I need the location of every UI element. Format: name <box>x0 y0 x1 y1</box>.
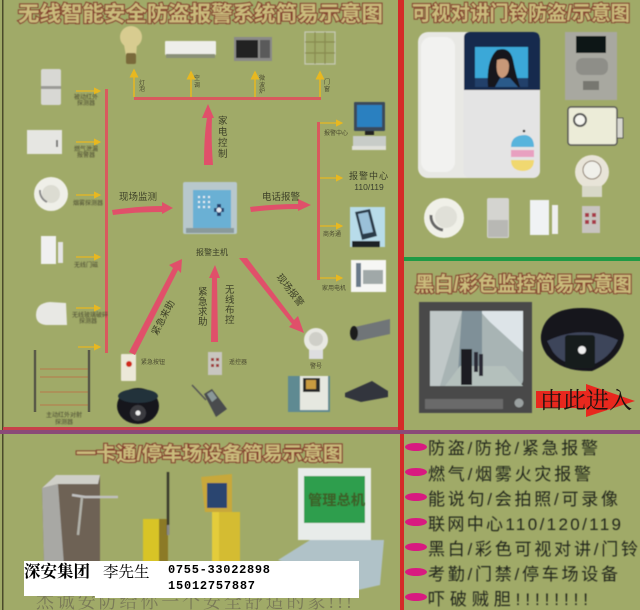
icon: air conditioner <box>165 41 216 58</box>
label: wireless arming and help: 求 <box>198 306 208 318</box>
icon: smoke detector large <box>424 198 464 238</box>
icon: light bulb <box>120 26 142 64</box>
sensor labels: 探测器 <box>77 99 95 107</box>
label: alarm center 110/119: 报警中心 <box>349 170 389 181</box>
label: remote control: 遥控器 <box>229 358 247 366</box>
sensor labels: 被动红外 <box>74 93 98 101</box>
sensor labels: 探测器 <box>55 418 73 426</box>
contact box: 15012757887 <box>168 579 255 593</box>
icon: remote control <box>208 352 222 375</box>
label: PDA: 商务通 <box>323 230 341 238</box>
appliance control bus: 空 <box>194 74 200 82</box>
arrow: on-site alarm <box>239 258 304 333</box>
label: phone alarm: 电话报警 <box>262 191 301 203</box>
icon: curtain sensor <box>36 302 67 325</box>
panel: wireless alarm system <box>18 2 390 426</box>
label: alarm host: 报警主机 <box>196 247 228 257</box>
sensor labels <box>46 93 108 426</box>
icon: CCTV monitor <box>419 302 532 413</box>
arrow: enter here <box>536 384 635 417</box>
icon: siren <box>304 328 328 359</box>
icon: video intercom small <box>288 376 330 412</box>
arrow: on-site monitoring <box>112 202 173 215</box>
sensor labels: 无线玻璃破碎 <box>72 311 108 319</box>
label: wireless arming and help: 助 <box>198 316 208 328</box>
appliance control bus: 泡 <box>139 85 145 93</box>
icon: barrier gate <box>143 472 170 563</box>
sensor labels: 报警器 <box>77 151 95 159</box>
contact box <box>24 561 359 598</box>
icon: infrared beam fence <box>35 350 89 412</box>
icon: alarm host <box>183 182 237 234</box>
sensor labels: 无线门磁 <box>74 261 98 269</box>
appliance control bus: 微 <box>259 74 265 82</box>
appliance control bus: 调 <box>194 81 200 89</box>
icon: DVR box <box>345 381 388 402</box>
appliance control bus: 炉 <box>259 87 265 95</box>
icon: home telephone <box>351 260 386 292</box>
label: wireless arming and help: 无 <box>225 285 235 296</box>
appliance control bus <box>134 70 330 100</box>
title: CCTV monitoring: 黑白/彩色监控简易示意图 <box>415 272 632 296</box>
arrow: phone alarm <box>250 199 311 212</box>
icon: turnstile <box>42 475 118 565</box>
label: wireless arming and help: 控 <box>225 314 235 326</box>
label: appliance control: 家 <box>218 115 228 127</box>
title: access card and parking: 一卡通/停车场设备简易示意图 <box>76 442 343 465</box>
icon: PIR sensor <box>41 69 61 105</box>
list item 3: 能说句/会拍照/可录像 <box>428 490 618 509</box>
label: alarm center 110/119 <box>349 170 389 192</box>
title: wireless alarm system: 无线智能安全防盗报警系统简易示意图 <box>18 2 383 26</box>
icon: door contact <box>530 200 558 235</box>
label: panic button: 紧急按钮 <box>141 358 165 366</box>
panel: CCTV monitoring <box>415 272 635 417</box>
list item 7: 吓破贼胆!!!!!!!! <box>428 590 588 609</box>
label: home telephone: 家用电机 <box>322 284 346 292</box>
label: wireless arming and help <box>198 285 235 328</box>
label: appliance control: 制 <box>218 148 228 160</box>
icon: video intercom handset and body <box>418 32 540 178</box>
list item 2: 燃气/烟雾火灾报警 <box>428 465 591 484</box>
sensor labels: 燃气泄漏 <box>74 145 98 153</box>
panel: feature list <box>405 439 638 609</box>
label: on-site alarm: 现场报警 <box>274 271 307 309</box>
icon: microwave <box>234 37 272 61</box>
icon: gas detector <box>27 130 62 154</box>
list item 6: 考勤/门禁/停车场设备 <box>428 565 618 584</box>
label: on-site monitoring: 现场监测 <box>119 191 157 203</box>
phone numbers: 0755-33022898 <box>168 563 270 577</box>
appliance control bus: 波 <box>259 81 265 89</box>
label: alarm center 110/119: 110/119 <box>354 182 384 192</box>
label: enter here: 由此进入 <box>540 388 632 413</box>
list item 5: 黑白/彩色可视对讲/门铃 <box>428 540 638 559</box>
list item 4: 联网中心110/120/119 <box>428 515 621 534</box>
sensor labels: 烟雾探测器 <box>73 199 103 207</box>
appliance control bus: 门 <box>324 78 330 86</box>
icon: PDA <box>350 207 385 247</box>
icon: smoke detector <box>34 177 68 211</box>
icon: parking pay station <box>201 474 240 562</box>
icon: camcorder <box>350 319 390 341</box>
company name: 深安集团 <box>24 562 90 581</box>
label: control computer screen: 管理总机 <box>308 492 365 508</box>
icon: panic button <box>121 354 136 381</box>
icon: control computer <box>278 468 384 590</box>
label: alarm center small: 报警中心 <box>324 129 348 137</box>
sensor labels: 主动红外对射 <box>46 411 82 419</box>
icon: electric lock <box>568 107 623 145</box>
sensor bus <box>76 89 108 353</box>
icon: desktop computer <box>352 102 386 150</box>
arrow: appliance control <box>202 104 214 165</box>
panel: access card and parking <box>24 442 384 610</box>
panel: video door phone <box>412 1 630 238</box>
icon: door sensor <box>41 236 63 264</box>
icon: remote large <box>582 206 600 233</box>
icon: window grid <box>305 32 335 64</box>
list item 1: 防盗/防抢/紧急报警 <box>428 439 598 458</box>
label: wireless arming and help: 急 <box>198 296 208 308</box>
icon: PIR sensor large <box>487 198 509 238</box>
icon: siren large <box>575 155 609 197</box>
icon: dome camera large <box>541 308 624 371</box>
label: appliance control <box>218 115 228 160</box>
right output bus <box>317 122 342 280</box>
label: appliance control: 控 <box>218 137 228 149</box>
title: video door phone: 可视对讲门铃防盗/示意图 <box>412 1 630 25</box>
arrow: emergency help <box>129 259 182 355</box>
label: wireless arming and help: 布 <box>225 304 235 316</box>
appliance control bus: 窗 <box>324 85 330 93</box>
label: appliance control: 电 <box>218 126 228 138</box>
label: wireless arming and help: 紧 <box>198 287 208 298</box>
icon: handheld transmitter <box>192 385 227 417</box>
label: wireless arming and help: 线 <box>225 294 235 306</box>
label: emergency help: 紧急来助 <box>149 298 177 337</box>
icon: door station <box>565 32 617 100</box>
icon: dome camera small <box>117 388 159 424</box>
arrow: wireless arming <box>209 265 220 342</box>
sensor labels: 探测器 <box>79 317 97 325</box>
contact person: 李先生 <box>103 563 150 581</box>
label: siren: 警号 <box>310 362 322 370</box>
appliance control bus: 灯 <box>139 79 145 87</box>
